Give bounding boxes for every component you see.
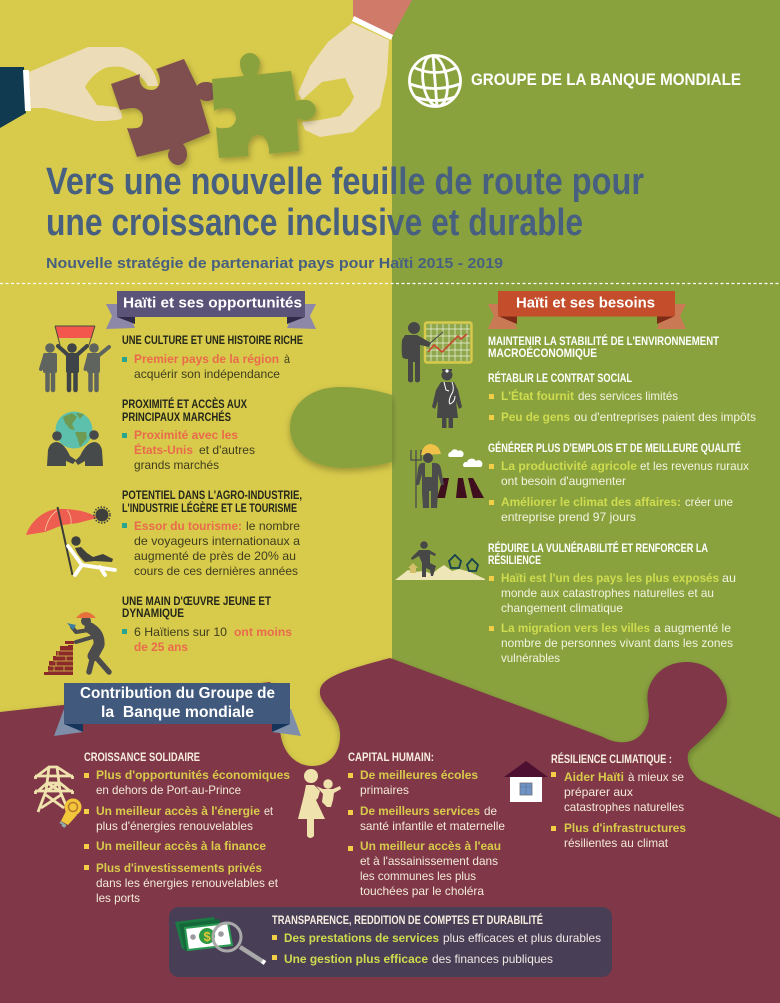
panel: croissance solidaire: Plus d'opportunités économiques <box>96 768 290 782</box>
panel: capital humain: CAPITAL HUMAIN: <box>348 750 434 764</box>
item: culture: Premier pays de la région <box>134 352 279 366</box>
item: main d'oeuvre: de 25 ans <box>134 640 188 654</box>
panel: croissance solidaire: Plus d'investissements privés <box>96 861 262 875</box>
item: vulnérabilité: Haïti est l'un des pays les plus exposés <box>501 571 719 585</box>
item: vulnérabilité: vulnérables <box>501 651 560 665</box>
item: proximité: PROXIMITÉ ET ACCÈS AUX <box>122 397 247 411</box>
banner: Haïti et ses besoins: Haïti et ses besoins <box>516 294 655 312</box>
item: potentiel: le nombre <box>246 519 300 533</box>
item: emplois: créer une <box>685 495 733 509</box>
left cuff <box>23 70 31 111</box>
background: yellow left half <box>0 0 392 1003</box>
item: emplois: entreprise prend 97 jours <box>501 510 636 524</box>
banner: Contribution du Groupe de la Banque mondiale <box>54 683 301 736</box>
left hand <box>29 47 158 121</box>
item: stabilité <box>488 334 720 360</box>
item: contrat social: L'État fournit <box>501 388 574 403</box>
brown puzzle piece <box>111 59 217 165</box>
item: proximité: PRINCIPAUX MARCHÉS <box>122 410 231 424</box>
cloud <box>463 459 482 467</box>
item: main d'oeuvre: 6 Haïtiens sur 10 <box>134 625 227 639</box>
subtitle: Nouvelle stratégie de partenariat pays pour Haïti 2015 - 2019 <box>46 256 503 272</box>
panel: croissance solidaire: en dehors de Port-au-Prince <box>96 783 241 797</box>
left sleeve <box>0 67 26 128</box>
item: stabilité: MAINTENIR LA STABILITÉ DE L'ENVIRONNEMENT <box>488 334 720 348</box>
right hand <box>298 23 389 137</box>
icon: globe and handshake <box>47 412 103 466</box>
panel: transparence box <box>169 907 612 977</box>
background: green right half <box>392 0 780 1003</box>
item: potentiel <box>122 488 302 578</box>
item: vulnérabilité: a augmenté le <box>654 621 731 635</box>
panel: capital humain: et à l'assainissement dans <box>360 854 498 868</box>
item: culture <box>122 333 303 381</box>
panel: croissance solidaire <box>84 750 290 905</box>
item: culture: UNE CULTURE ET UNE HISTOIRE RICHE <box>122 333 303 347</box>
item: vulnérabilité <box>488 541 736 665</box>
item: emplois: ont besoin d'augmenter <box>501 474 626 488</box>
cloud <box>448 449 464 457</box>
panel: transparence box: Des prestations de services <box>284 931 439 945</box>
banner: Contribution du Groupe de la Banque mondiale: Contribution du Groupe de <box>80 685 275 702</box>
panel: transparence box: plus efficaces et plus durables <box>443 931 601 945</box>
item: contrat social: RÉTABLIR LE CONTRAT SOCIAL <box>488 371 632 385</box>
icon: presenter with chart <box>402 322 472 382</box>
item: main d'oeuvre: UNE MAIN D'ŒUVRE JEUNE ET <box>122 594 272 608</box>
panel: capital humain: de <box>484 804 497 818</box>
panel: résilience climatique: catastrophes naturelles <box>564 800 684 814</box>
item: culture: acquérir son indépendance <box>134 367 280 381</box>
logo: World Bank globe <box>410 54 460 108</box>
item: emplois: Améliorer le climat des affaires: <box>501 495 681 509</box>
panel: capital humain: primaires <box>360 783 409 797</box>
panel: capital humain: touchées par le choléra <box>360 884 484 898</box>
panel: transparence box: des finances publiques <box>432 952 553 966</box>
title <box>46 161 644 244</box>
panel: croissance solidaire: et <box>264 804 274 818</box>
item: main d'oeuvre: ont moins <box>234 625 292 639</box>
item: vulnérabilité: RÉSILIENCE <box>488 553 541 567</box>
icon: bricklayer <box>44 612 109 675</box>
item: vulnérabilité: au <box>722 571 736 585</box>
item: proximité: et d'autres <box>199 443 255 457</box>
item: culture: à <box>284 352 290 366</box>
item: potentiel: L'INDUSTRIE LÉGÈRE ET LE TOURISME <box>122 501 297 515</box>
banner: Haïti et ses opportunités: Haïti et ses opportunités <box>123 294 302 312</box>
panel: opportunités items <box>122 333 303 654</box>
icon: house <box>504 761 548 802</box>
item: contrat social: des services limités <box>578 389 678 403</box>
icon: doctor <box>432 369 462 428</box>
icon: protest crowd with banner <box>41 326 109 390</box>
item: vulnérabilité: changement climatique <box>501 601 623 615</box>
panel: besoins items <box>488 334 756 665</box>
item: vulnérabilité: La migration vers les villes <box>501 621 650 635</box>
panel: résilience climatique: préparer aux <box>564 785 633 799</box>
panel: résilience climatique <box>551 752 686 850</box>
right cuff <box>352 16 393 40</box>
panel: croissance solidaire: plus d'énergies renouvelables <box>96 819 253 833</box>
banner: Haïti et ses opportunités <box>106 291 316 329</box>
item: vulnérabilité: RÉDUIRE LA VULNÉRABILITÉ ET RENFORCER LA <box>488 541 708 555</box>
icon: money under magnifier <box>175 917 265 963</box>
item: emplois <box>488 441 749 524</box>
panel: croissance solidaire: dans les énergies renouvelables et <box>96 876 279 890</box>
panel: capital humain: De meilleures écoles <box>360 768 478 782</box>
panel: capital humain: les communes les plus <box>360 869 476 883</box>
item: proximité: Proximité avec les <box>134 428 238 442</box>
banner: Contribution du Groupe de la Banque mondiale: la Banque mondiale <box>101 704 254 721</box>
item: contrat social: Peu de gens <box>501 410 570 424</box>
icon: pylon and light bulb <box>35 767 82 827</box>
item: main d'oeuvre: DYNAMIQUE <box>122 606 184 620</box>
panel: croissance solidaire: CROISSANCE SOLIDAIRE <box>84 750 200 764</box>
item: vulnérabilité: nombre de personnes vivant dans les zones <box>501 636 733 650</box>
item: proximité <box>122 397 255 472</box>
item: potentiel: cours de ces dernières années <box>134 564 298 578</box>
item: contrat social <box>488 371 756 424</box>
item: emplois: La productivité agricole <box>501 459 637 473</box>
panel: transparence box: TRANSPARENCE, REDDITION DE COMPTES ET DURABILITÉ <box>272 913 543 927</box>
logo wordmark: GROUPE DE LA BANQUE MONDIALE <box>471 71 741 89</box>
panel: capital humain: De meilleurs services <box>360 804 480 818</box>
right sleeve <box>353 0 412 35</box>
banner: Haïti et ses besoins <box>488 291 686 329</box>
panel: transparence box: Une gestion plus efficace <box>284 952 428 966</box>
icon: farmer and field <box>411 444 484 508</box>
item: vulnérabilité: monde aux catastrophes naturelles et au <box>501 586 714 600</box>
panel: résilience climatique: Plus d'infrastructures <box>564 821 686 835</box>
item: proximité: États-Unis <box>134 442 193 457</box>
item: contrat social: ou d'entreprises paient des impôts <box>574 410 756 424</box>
green puzzle piece <box>212 53 316 158</box>
icon: umbrella and lounger <box>26 507 115 575</box>
panel: capital humain <box>348 750 505 898</box>
item: emplois: et les revenus ruraux <box>640 459 749 473</box>
icon: earthquake and houses <box>395 541 485 580</box>
item: proximité: grands marchés <box>134 458 219 472</box>
icon: mother and child <box>298 769 341 838</box>
panel: capital humain: Un meilleur accès à l'eau <box>360 839 501 853</box>
item: potentiel: Essor du tourisme: <box>134 519 242 533</box>
panel: croissance solidaire: les ports <box>96 891 140 905</box>
panel: résilience climatique: RÉSILIENCE CLIMATIQUE : <box>551 752 672 766</box>
title: une croissance inclusive et durable <box>46 202 583 244</box>
item: stabilité: MACROÉCONOMIQUE <box>488 346 597 360</box>
panel: maroon bottom puzzle piece <box>0 658 780 1003</box>
panel: résilience climatique: à mieux se <box>628 770 684 784</box>
puzzle knob: green into yellow <box>290 387 392 468</box>
panel: résilience climatique: Aider Haïti <box>564 770 624 784</box>
panel: croissance solidaire: Un meilleur accès à l'énergie <box>96 804 260 818</box>
panel: résilience climatique: résilientes au climat <box>564 836 669 850</box>
illustration: hands holding puzzle pieces <box>0 0 412 165</box>
panel: capital humain: santé infantile et maternelle <box>360 819 505 833</box>
item: main d'oeuvre <box>122 594 292 654</box>
panel: croissance solidaire: Un meilleur accès à la finance <box>96 839 266 853</box>
item: potentiel: POTENTIEL DANS L'AGRO-INDUSTRIE, <box>122 488 302 502</box>
item: potentiel: augmenté de près de 20% au <box>134 549 296 563</box>
item: potentiel: de voyageurs internationaux a <box>134 534 300 548</box>
icon: money under magnifier: $ <box>204 929 212 944</box>
title: Vers une nouvelle feuille de route pour <box>46 161 644 203</box>
